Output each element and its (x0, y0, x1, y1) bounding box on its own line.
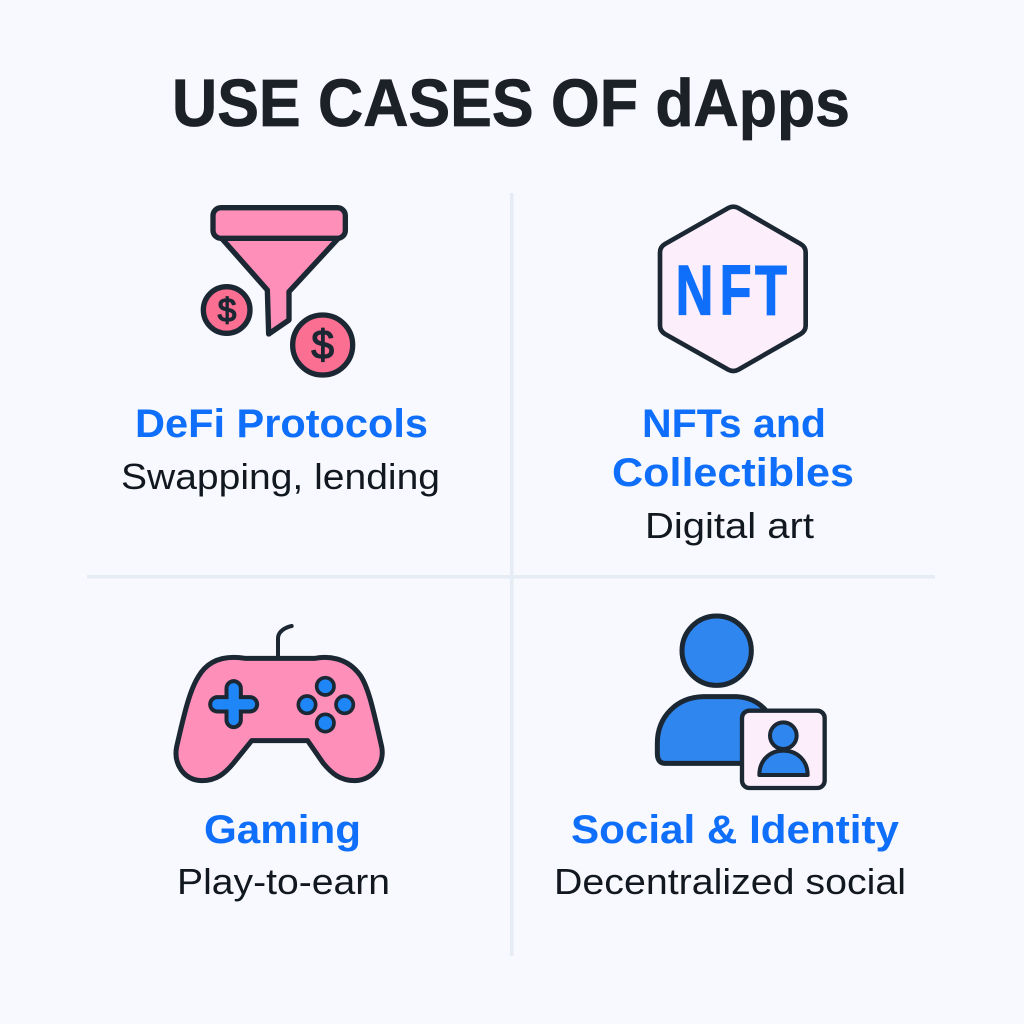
icon: user with profile card (657, 616, 825, 788)
icon: NFT hexagon: T (755, 252, 787, 330)
heading: Social & Identity: Social & Identity (571, 808, 900, 852)
icon: NFT hexagon: F (720, 252, 752, 330)
icon: NFT hexagon: N (676, 252, 713, 330)
text: Digital art: Digital art (645, 505, 814, 546)
icon: funnel with coins: $ (218, 293, 236, 330)
icon: NFT hexagon (660, 207, 806, 371)
panel: Social & Identity (554, 616, 906, 902)
title: USE CASES OF dApps (172, 66, 850, 141)
heading: Gaming: Gaming (204, 808, 361, 852)
heading: DeFi Protocols: DeFi Protocols (135, 402, 428, 446)
text: Swapping, lending: Swapping, lending (121, 456, 440, 497)
panel: NFTs and Collectibles (612, 207, 854, 546)
icon: funnel with coins: $ (311, 321, 334, 367)
text: Play-to-earn: Play-to-earn (177, 861, 390, 902)
panel: Gaming (176, 626, 390, 902)
heading: NFTs and Collectibles: Collectibles (612, 451, 854, 495)
icon: funnel with coins (203, 208, 353, 375)
heading: NFTs and Collectibles (612, 402, 854, 495)
heading: NFTs and Collectibles: NFTs and (642, 402, 826, 446)
icon: game controller (176, 626, 382, 781)
text: Decentralized social: Decentralized social (554, 861, 906, 902)
panel: DeFi Protocols (121, 208, 440, 497)
